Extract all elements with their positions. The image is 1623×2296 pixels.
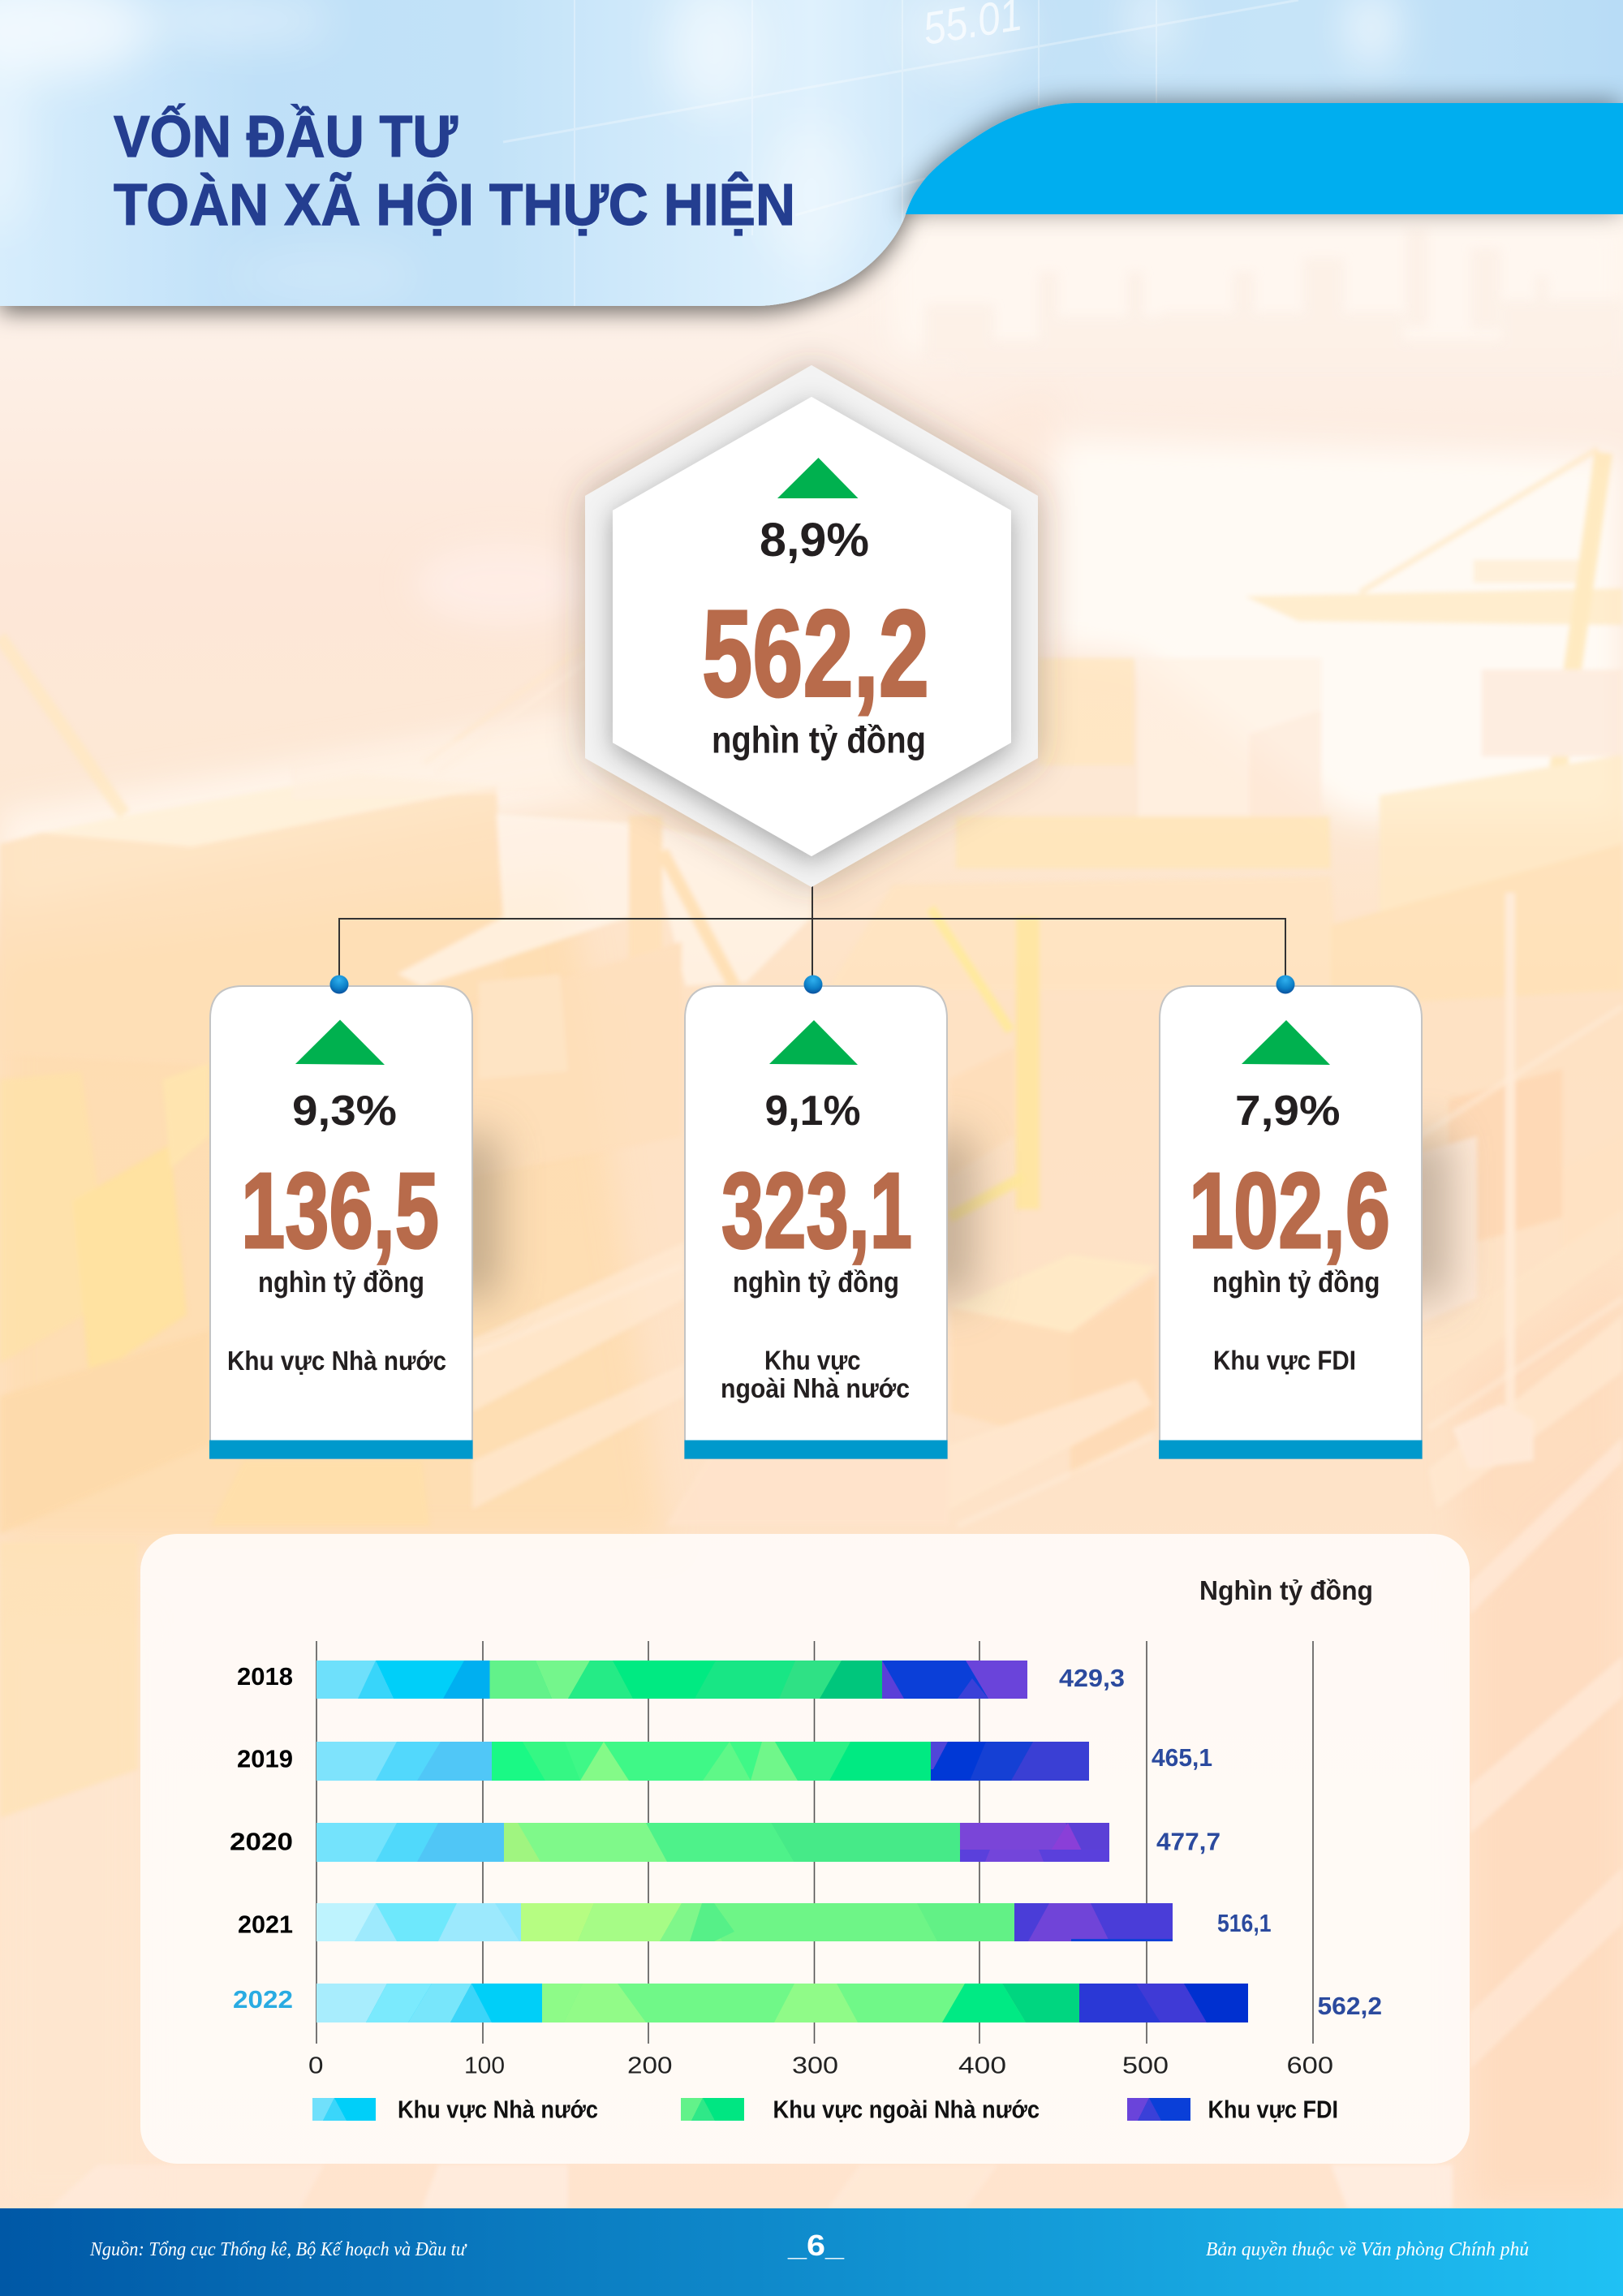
header band: [0, 0, 1623, 308]
legend: state sector: [312, 2096, 598, 2123]
title: VỐN ĐẦU TƯ: [114, 103, 458, 170]
chart unit label: Nghìn tỷ đồng: [1199, 1575, 1373, 1605]
total value: 562,2: [702, 584, 929, 722]
legend: FDI sector: Khu vực FDI: [1208, 2096, 1338, 2123]
icon: up arrow triangle: [1242, 1020, 1330, 1065]
growth rate: 8,9%: [760, 514, 869, 566]
card shadows: [446, 1136, 1446, 1299]
connector dot: [329, 976, 349, 993]
legend: non-state sector: [681, 2096, 1040, 2123]
title: TOÀN XÃ HỘI THỰC HIỆN: [114, 172, 795, 238]
sector name: Khu vực: [764, 1346, 860, 1375]
year labels: [230, 1662, 293, 2014]
legend: state sector: Khu vực Nhà nước: [398, 2096, 598, 2123]
axis labels: 0: [308, 2053, 323, 2079]
bar 2022: [316, 1984, 1248, 2022]
value: 102,6: [1189, 1151, 1390, 1270]
growth rate: 9,3%: [292, 1088, 397, 1135]
axis labels: [308, 2053, 1333, 2079]
legend: FDI sector: [1127, 2096, 1338, 2123]
total value labels: 516,1: [1217, 1909, 1271, 1937]
title: [114, 103, 795, 238]
total value labels: [1059, 1664, 1382, 2020]
page number: _6_: [787, 2229, 845, 2262]
sector name: [721, 1346, 910, 1403]
footer band: [0, 2208, 1623, 2296]
total value labels: 477,7: [1156, 1828, 1220, 1855]
year labels: 2020: [230, 1828, 293, 1855]
legend: [312, 2096, 1338, 2123]
unit: nghìn tỷ đồng: [258, 1265, 424, 1299]
panel: card non-state sector: [685, 976, 948, 1459]
growth rate: 7,9%: [1235, 1088, 1341, 1135]
value: 323,1: [721, 1151, 912, 1270]
bar 2019: [316, 1742, 1089, 1781]
connector lines: [339, 885, 1285, 978]
legend: non-state sector: Khu vực ngoài Nhà nước: [773, 2096, 1040, 2123]
source note: Nguồn: Tổng cục Thống kê, Bộ Kế hoạch và Đầu tư: [89, 2239, 467, 2260]
unit: nghìn tỷ đồng: [733, 1265, 899, 1299]
bar 2018: [316, 1661, 1027, 1699]
panel: stacked bar chart: [140, 1534, 1470, 2164]
connector dot: [1276, 976, 1295, 993]
sector name: Khu vực Nhà nước: [227, 1346, 446, 1376]
connector dot: [803, 976, 823, 993]
icon: up arrow triangle: [295, 1019, 385, 1065]
total value labels: 429,3: [1059, 1664, 1125, 1692]
axis labels: 200: [627, 2053, 672, 2079]
bar 2020: [316, 1823, 1109, 1862]
year labels: 2018: [237, 1662, 293, 1691]
sector name: ngoài Nhà nước: [721, 1373, 910, 1403]
year labels: 2021: [238, 1910, 293, 1938]
growth rate: 9,1%: [764, 1088, 860, 1135]
axis labels: 400: [958, 2053, 1006, 2079]
unit: nghìn tỷ đồng: [1212, 1265, 1380, 1299]
year labels: 2022: [233, 1985, 293, 2014]
icon: up arrow triangle: [769, 1020, 858, 1065]
panel: total hexagon: [585, 365, 1038, 887]
unit: nghìn tỷ đồng: [712, 719, 926, 761]
total value labels: 562,2: [1318, 1992, 1382, 2020]
bar 2021: [316, 1903, 1173, 1941]
axis labels: 500: [1122, 2053, 1169, 2079]
panel: card state sector: [209, 976, 472, 1459]
sector name: Khu vực FDI: [1213, 1346, 1356, 1375]
axis labels: 300: [792, 2053, 838, 2079]
copyright note: Bản quyền thuộc về Văn phòng Chính phủ: [1206, 2239, 1529, 2260]
panel: card FDI sector: [1159, 976, 1422, 1459]
icon: up arrow triangle: [777, 458, 859, 498]
total value labels: 465,1: [1152, 1743, 1212, 1772]
axis labels: 600: [1287, 2053, 1333, 2079]
year labels: 2019: [237, 1745, 293, 1773]
value: 136,5: [241, 1151, 439, 1270]
axis labels: 100: [464, 2053, 505, 2079]
